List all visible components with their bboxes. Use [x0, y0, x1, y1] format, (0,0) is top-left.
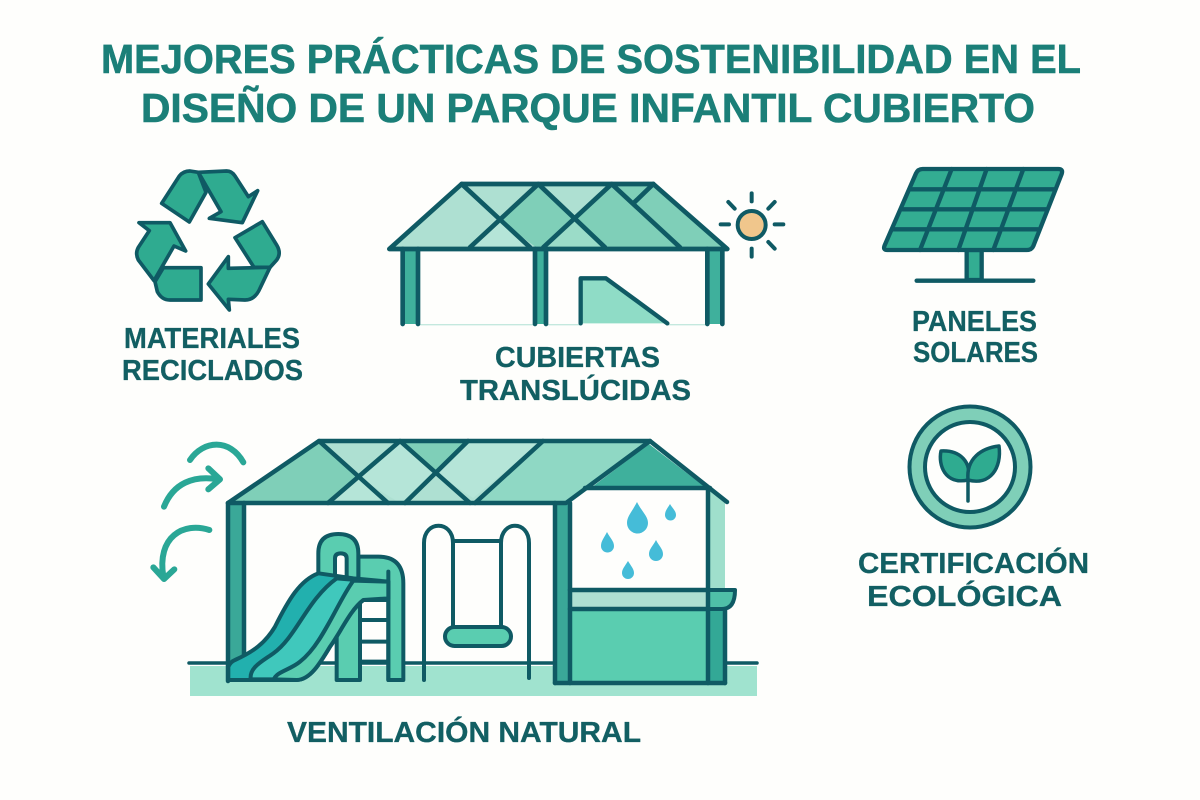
label: cubiertas translúcidas: CUBIERTAS [495, 342, 660, 374]
illustration: indoor playground with natural ventilation [153, 441, 757, 696]
title [101, 36, 1081, 131]
slide shape [581, 278, 667, 323]
gutter [708, 590, 735, 609]
building posts and tank [228, 488, 725, 683]
roof and post lines [389, 184, 727, 324]
label: certificación ecológica: CERTIFICACIÓN [858, 546, 1089, 580]
label: certificación ecológica [858, 546, 1089, 613]
roof panels [389, 184, 727, 249]
title: MEJORES PRÁCTICAS DE SOSTENIBILIDAD EN EL [101, 36, 1081, 82]
label: paneles solares: PANELES [912, 306, 1037, 338]
ground [190, 666, 757, 696]
icon: water drops [601, 502, 676, 579]
label: materiales reciclados: RECICLADOS [122, 355, 303, 387]
title: DISEÑO DE UN PARQUE INFANTIL CUBIERTO [141, 85, 1035, 131]
icon: sun [721, 193, 783, 257]
icon: solar panel [884, 169, 1062, 281]
swing [424, 526, 529, 680]
slide and ladder [228, 534, 403, 680]
label: materiales reciclados: MATERIALES [124, 323, 300, 355]
label: materiales reciclados [122, 323, 303, 387]
arrows: airflow [153, 445, 243, 579]
icon: recycling symbol [137, 171, 279, 310]
label: cubiertas translúcidas: TRANSLÚCIDAS [460, 373, 691, 407]
label: paneles solares: SOLARES [913, 337, 1038, 369]
label: certificación ecológica: ECOLÓGICA [867, 579, 1062, 613]
building roof panels [228, 441, 705, 503]
label: cubiertas translúcidas [460, 342, 691, 407]
structure lines [228, 441, 727, 683]
icon: translucent roof shelter with sun [389, 184, 783, 325]
label: ventilación natural: VENTILACIÓN NATURAL [287, 715, 641, 749]
label: paneles solares [912, 306, 1038, 369]
icon: sprout [940, 446, 999, 501]
icon: eco certification badge [910, 406, 1030, 528]
posts [403, 249, 722, 324]
